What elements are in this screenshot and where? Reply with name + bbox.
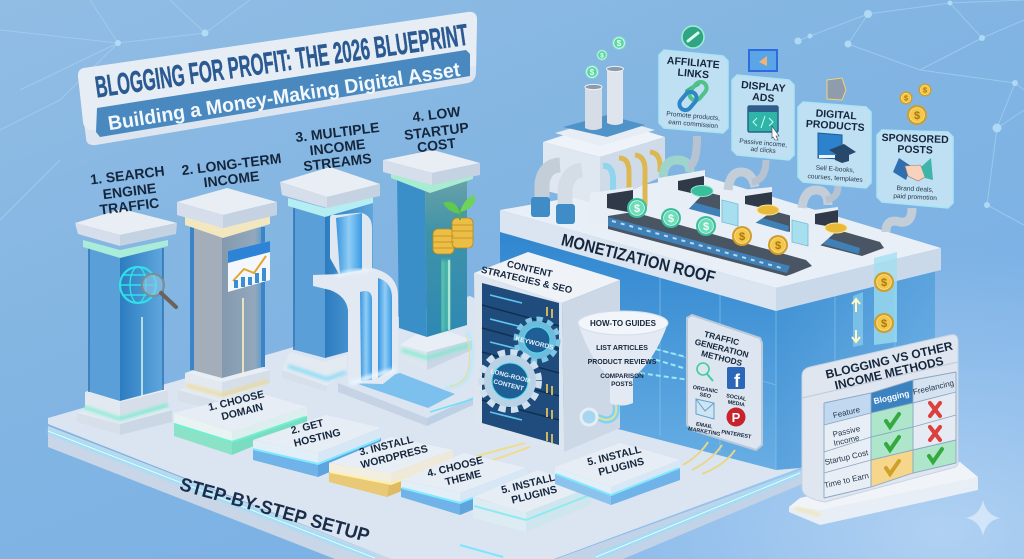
floating money symbols <box>585 36 626 79</box>
gate 2 <box>658 170 705 218</box>
waterfall channel <box>313 213 473 426</box>
pillar 2 label <box>181 150 282 190</box>
sparkle mark <box>966 500 1000 536</box>
pillar 2: long-term income <box>177 150 282 412</box>
card: digital products <box>798 78 871 188</box>
setup step 2: get hosting: HOSTING <box>293 426 342 450</box>
comparison table: Freelancing <box>912 378 955 397</box>
card: sponsored posts <box>877 84 953 208</box>
pillar 3 label: STREAMS <box>302 150 372 174</box>
funnel: content types: POSTS <box>611 381 634 388</box>
pillar 4 label: 4. LOW <box>411 103 462 125</box>
setup step 1: choose domain <box>174 388 307 455</box>
icon: organic seo: SEO <box>699 392 711 400</box>
icon: pinterest: P <box>732 410 741 425</box>
icon: book and graduation cap <box>818 133 856 163</box>
funnel: content types: PRODUCT REVIEWS <box>588 359 657 366</box>
setup step 4: choose theme: THEME <box>444 468 483 488</box>
setup step 5: install plugins: 5. INSTALL <box>500 471 557 497</box>
icon: package <box>827 78 846 100</box>
upper chute <box>330 213 372 276</box>
pillar 1 label: 1. SEARCH <box>89 163 165 188</box>
setup step 5: install plugins <box>473 470 591 532</box>
setup step 4: choose theme: 4. CHOOSE <box>426 454 484 480</box>
icon: coins and sprout <box>433 195 475 254</box>
setup step 5: install plugins: PLUGINS <box>510 484 558 507</box>
pillar 1 label: ENGINE <box>102 180 157 202</box>
setup step 1: choose domain: DOMAIN <box>220 401 264 423</box>
heading: traffic generation: GENERATION <box>694 337 750 360</box>
heading: content strategies: CONTENT <box>506 259 554 280</box>
table heading: INCOME METHODS <box>833 354 945 392</box>
card: affiliate links: earn commission <box>668 119 719 130</box>
pillar 3 label: INCOME <box>309 136 366 158</box>
pillar 3: multiple income streams <box>280 119 380 392</box>
base platform <box>48 296 802 559</box>
setup step 5 duplicate: install plugins: 5. INSTALL <box>586 443 643 469</box>
icon: ad screen <box>749 50 777 71</box>
pillar 1 label: TRAFFIC <box>99 194 160 218</box>
icon: social media: SOCIAL <box>726 393 747 403</box>
icon: social media: f <box>734 371 741 391</box>
pipes <box>542 136 912 232</box>
icon: chain <box>677 79 709 113</box>
pillar 3 label: 3. MULTIPLE <box>294 119 380 145</box>
card: affiliate links: AFFILIATE <box>666 55 720 71</box>
card: display ads: Passive income, <box>739 138 788 149</box>
card: affiliate links <box>659 26 728 133</box>
table base <box>789 462 978 525</box>
panel: traffic generation methods <box>687 315 762 450</box>
pillar 1: search engine traffic <box>75 163 177 435</box>
gate 3 <box>720 187 772 231</box>
table heading: BLOGGING VS OTHER <box>824 339 954 382</box>
belt 3 <box>746 204 792 232</box>
comparison table <box>823 372 956 498</box>
belt 1 <box>608 212 812 276</box>
pillar 4 label: STARTUP <box>403 119 470 143</box>
pillar 3 label <box>294 119 380 174</box>
comparison table: Passive <box>832 424 862 439</box>
title plate <box>78 12 477 145</box>
heading: traffic generation: TRAFFIC <box>703 329 740 347</box>
icon: calendar with growth chart <box>228 241 270 292</box>
gear: long-room content <box>482 353 538 409</box>
heading: traffic generation <box>694 329 750 368</box>
gear: long-room content: CONTENT <box>493 378 524 393</box>
icon: email marketing <box>688 399 721 438</box>
funnel: content types: LIST ARTICLES <box>596 345 648 352</box>
data cables <box>445 330 735 474</box>
setup step 2: get hosting: 2. GET <box>290 417 325 437</box>
gate 4 <box>790 207 838 252</box>
icon: handshake <box>893 158 933 181</box>
funnel: content types <box>578 311 668 425</box>
factory on the roof <box>531 36 912 232</box>
card: digital products: PRODUCTS <box>805 118 865 134</box>
setup step 3: install wordpress: WORDPRESS <box>359 443 429 471</box>
comparison table: Blogging <box>873 388 910 406</box>
card: sponsored posts: SPONSORED <box>881 132 949 146</box>
card: digital products: courses, templates <box>807 173 864 184</box>
gear: keywords: KEYWORDS <box>515 335 555 352</box>
setup step 3: install wordpress: 3. INSTALL <box>358 433 415 459</box>
icon: pinterest <box>721 408 752 441</box>
coin flow column <box>852 252 897 347</box>
network pattern background <box>0 0 1024 225</box>
card: sponsored posts: Brand deals, <box>896 185 934 194</box>
comparison table: Income <box>833 433 861 448</box>
heading: step-by-step setup: STEP-BY-STEP SETUP <box>177 474 372 547</box>
chimneys <box>585 66 624 130</box>
icon: browser window <box>748 106 779 140</box>
pillar 4 label: COST <box>416 135 457 155</box>
pillar 2 label: INCOME <box>203 168 260 190</box>
icon: pinterest: PINTEREST <box>721 429 752 441</box>
pillar 4: low startup cost <box>383 103 480 370</box>
card: display ads: DISPLAY <box>741 79 786 95</box>
setup step 5 duplicate: install plugins <box>555 443 680 505</box>
pillar 4 label <box>403 103 470 155</box>
icon: social media <box>726 367 747 408</box>
roof slab <box>500 175 941 311</box>
setup step 3: install wordpress <box>329 433 453 497</box>
pillar 1 label <box>89 163 165 218</box>
comparison table: Startup Cost <box>824 448 870 467</box>
icon: globe and magnifier <box>120 267 176 307</box>
icon: social media: MEDIA <box>727 400 745 408</box>
card: digital products: DIGITAL <box>815 108 858 122</box>
heading: traffic generation: METHODS <box>700 348 744 368</box>
card: sponsored posts: paid promotion <box>893 193 937 202</box>
funnel: content types: COMPARISON <box>600 373 644 380</box>
gate 1 <box>590 187 635 232</box>
building glass walls <box>500 228 935 470</box>
icons: falling coins <box>900 84 932 125</box>
panel: blogging vs other income methods <box>789 335 978 525</box>
icon: organic seo: ORGANIC <box>692 385 718 395</box>
pillar 2 label: 2. LONG-TERM <box>181 150 282 178</box>
conveyor belts <box>590 170 884 276</box>
card: affiliate links: LINKS <box>677 67 709 81</box>
heading: content strategies: STRATEGIES & SEO <box>480 265 574 297</box>
card: digital products: Sell E-books, <box>815 165 855 174</box>
funnel: content types: HOW-TO GUIDES <box>590 319 657 328</box>
server rack <box>482 283 559 445</box>
card: sponsored posts: POSTS <box>897 143 933 157</box>
icon: affiliate link badge <box>682 26 704 48</box>
card: display ads: ad clicks <box>750 146 777 155</box>
comparison table: Time to Earn <box>823 471 870 490</box>
subtitle: Building a Money-Making Digital Asset <box>106 59 462 135</box>
setup step 4: choose theme <box>401 453 526 515</box>
card: affiliate links: Promote products, <box>666 111 720 122</box>
icon: email marketing: EMAIL <box>695 422 714 431</box>
tray <box>338 368 473 426</box>
factory body <box>543 115 665 205</box>
icon: organic seo <box>692 363 718 400</box>
coins on belts <box>627 186 847 255</box>
heading: monetization roof: MONETIZATION ROOF <box>559 230 717 287</box>
belt 2 <box>678 186 740 217</box>
card: display ads: ADS <box>752 91 775 105</box>
comparison table: Feature <box>832 405 861 420</box>
server: content strategies and seo <box>474 252 620 452</box>
setup step 5 duplicate: install plugins: PLUGINS <box>597 456 645 479</box>
card: display ads <box>732 50 794 160</box>
setup step 1: choose domain: 1. CHOOSE <box>207 388 265 414</box>
icon: email marketing: MARKETING <box>688 426 721 438</box>
belt 4 <box>815 224 884 256</box>
gear: long-room content: LONG-ROOM <box>490 368 531 385</box>
check and cross marks <box>886 403 942 474</box>
gear: keywords <box>515 320 557 360</box>
setup step 2: get hosting <box>253 415 381 477</box>
lower chute <box>313 268 398 384</box>
